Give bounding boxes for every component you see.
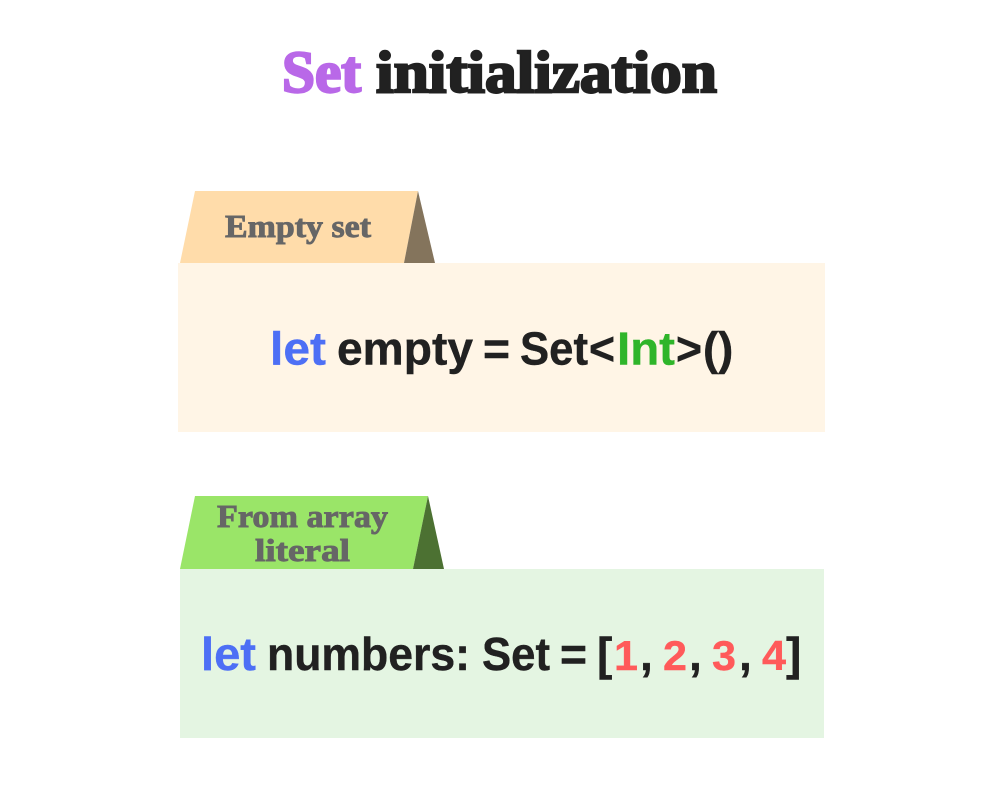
- tab: empty set: Empty set: [225, 208, 371, 244]
- code box: empty set: Int: [617, 322, 675, 374]
- panel: empty set: [178, 191, 825, 432]
- code box: from array literal: ,: [689, 628, 702, 680]
- tab: from array literal: [180, 496, 444, 569]
- code box: from array literal: 4: [762, 632, 787, 679]
- code box: empty set: >: [676, 322, 702, 374]
- title: Set: [282, 39, 361, 105]
- code box: empty set: empty: [337, 322, 473, 374]
- code box: from array literal: let: [201, 628, 256, 680]
- code box: from array literal: =: [560, 628, 587, 680]
- code box: from array literal: [180, 569, 824, 738]
- code box: empty set: let: [270, 322, 326, 374]
- code box: empty set: =: [483, 322, 510, 374]
- code box: from array literal: 1: [614, 632, 638, 679]
- code box: from array literal: ]: [786, 628, 801, 680]
- code box: empty set: [178, 263, 825, 432]
- code box: from array literal: Set: [482, 628, 550, 680]
- tab: from array literal: From array: [217, 498, 388, 534]
- code box: empty set: <: [589, 322, 615, 374]
- code box: from array literal: ,: [640, 628, 653, 680]
- tab: empty set: [180, 191, 435, 263]
- code box: from array literal: numbers:: [267, 628, 470, 680]
- title: initialization: [376, 39, 717, 105]
- code box: from array literal: [: [597, 628, 612, 680]
- code box: empty set: Set: [520, 322, 588, 374]
- panel: from array literal: [180, 496, 824, 738]
- code box: from array literal: ,: [739, 628, 752, 680]
- code box: empty set: (: [703, 322, 719, 374]
- tab: from array literal: literal: [255, 532, 350, 568]
- code box: from array literal: 2: [663, 632, 687, 679]
- code box: empty set: ): [718, 322, 733, 374]
- code box: from array literal: 3: [712, 632, 736, 679]
